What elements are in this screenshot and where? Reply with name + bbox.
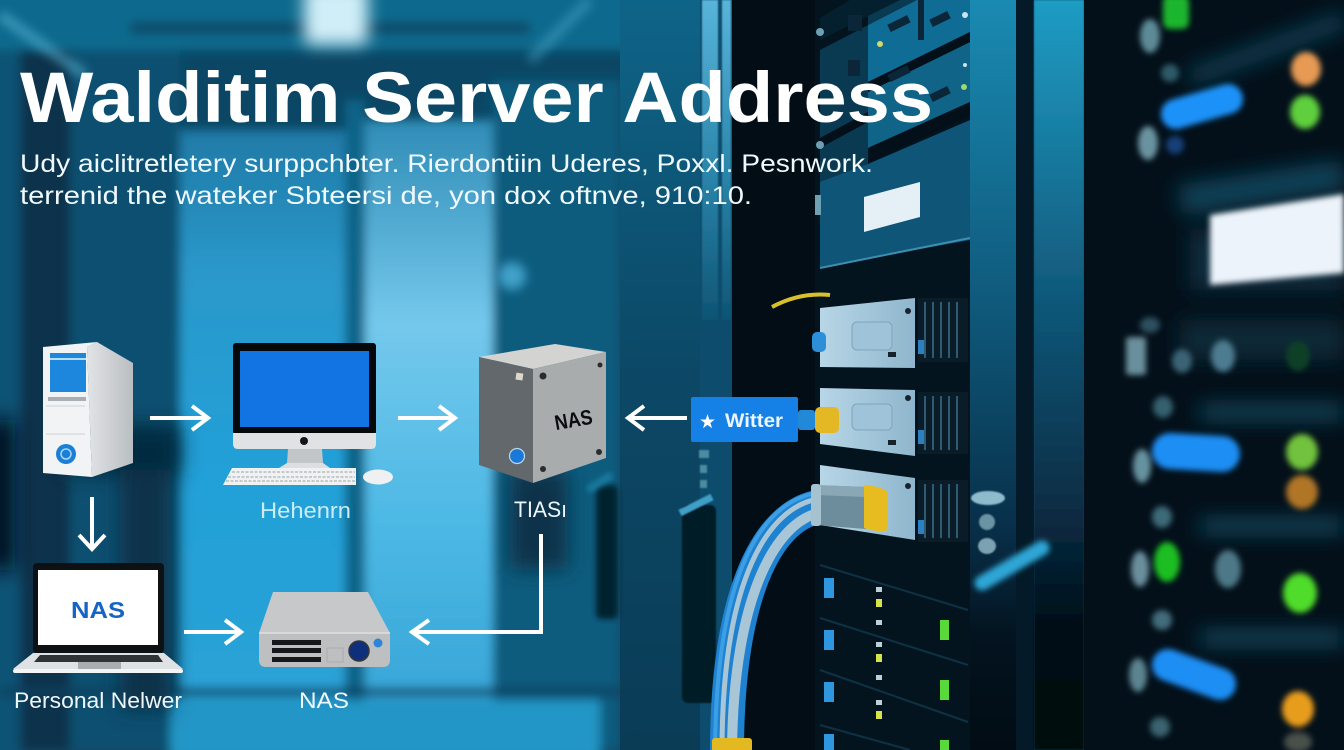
panel: server rack column <box>588 0 970 750</box>
icon: laptop <box>13 563 183 673</box>
panel: right pillars <box>970 0 1344 750</box>
icon: NAS device <box>259 592 390 667</box>
subtitle text: terrenid the wateker Sbteersi de, yon dox oftnve, 910:10. <box>20 182 752 210</box>
ceiling light <box>304 0 368 45</box>
button: Witter <box>691 397 839 442</box>
subtitle text: Udy aiclitretletery surppchbter. Rierdontiin Uderes, Poxxl. Pesnwork. <box>20 150 873 178</box>
icon: laptop: NAS <box>71 597 125 623</box>
arrow: tower to monitor <box>150 406 208 430</box>
arrow: button to NAS cube <box>628 406 687 430</box>
panel: blurred server lights <box>1126 0 1344 750</box>
arrow: NAS cube down to NAS device <box>412 534 541 644</box>
arrow: monitor to NAS box <box>398 406 455 430</box>
subtitle text <box>20 150 873 210</box>
yellow wire <box>772 294 830 307</box>
label: laptop: Personal Nelwer <box>14 688 182 713</box>
rack: network modules <box>812 298 968 542</box>
door handles <box>588 450 716 703</box>
rack: lower server units <box>820 565 968 750</box>
icon: NAS cube <box>479 344 606 483</box>
button: Witter: Witter <box>725 411 784 432</box>
arrow: down to laptop <box>79 497 105 549</box>
button: Witter: ★ <box>699 412 716 433</box>
title: Walditim Server Address <box>20 59 933 138</box>
arrow: laptop to NAS device <box>184 620 241 644</box>
icon: NAS cube: NAS <box>553 406 594 435</box>
label: monitor: Hehenrn <box>260 498 351 523</box>
label: NAS device: NAS <box>299 688 349 713</box>
icon: desktop monitor <box>223 343 393 485</box>
icon: desktop tower <box>43 342 133 477</box>
rack: slanted upper panels <box>815 0 970 268</box>
cable bundle <box>712 484 888 750</box>
label: NAS cube: TIASı <box>514 497 567 522</box>
